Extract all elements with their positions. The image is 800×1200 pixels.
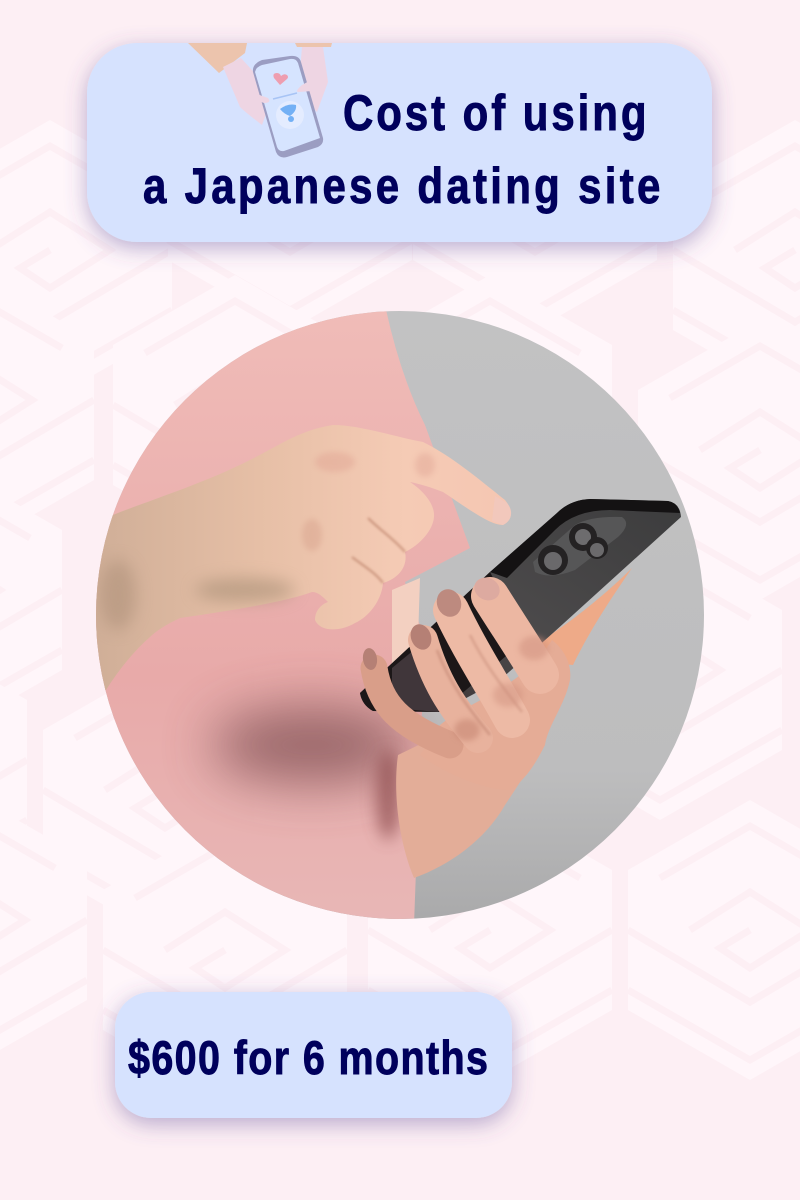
pink shirt [90, 305, 470, 925]
pointing hand [90, 425, 511, 690]
back of holding hand: thumb and forearm [396, 568, 632, 878]
heading line 1: Cost of using [343, 85, 649, 141]
price text: $600 for 6 months [128, 1033, 489, 1085]
title card [87, 43, 712, 242]
price card [115, 992, 512, 1118]
photo: hands holding a smartphone [90, 305, 710, 925]
fingernails [474, 578, 500, 600]
heading line 2: a Japanese dating site [143, 158, 664, 214]
icon: hands holding phone with heart [188, 43, 332, 157]
smartphone [360, 499, 681, 712]
holding hand fingers and palm [362, 574, 570, 790]
grey backdrop [90, 305, 710, 925]
